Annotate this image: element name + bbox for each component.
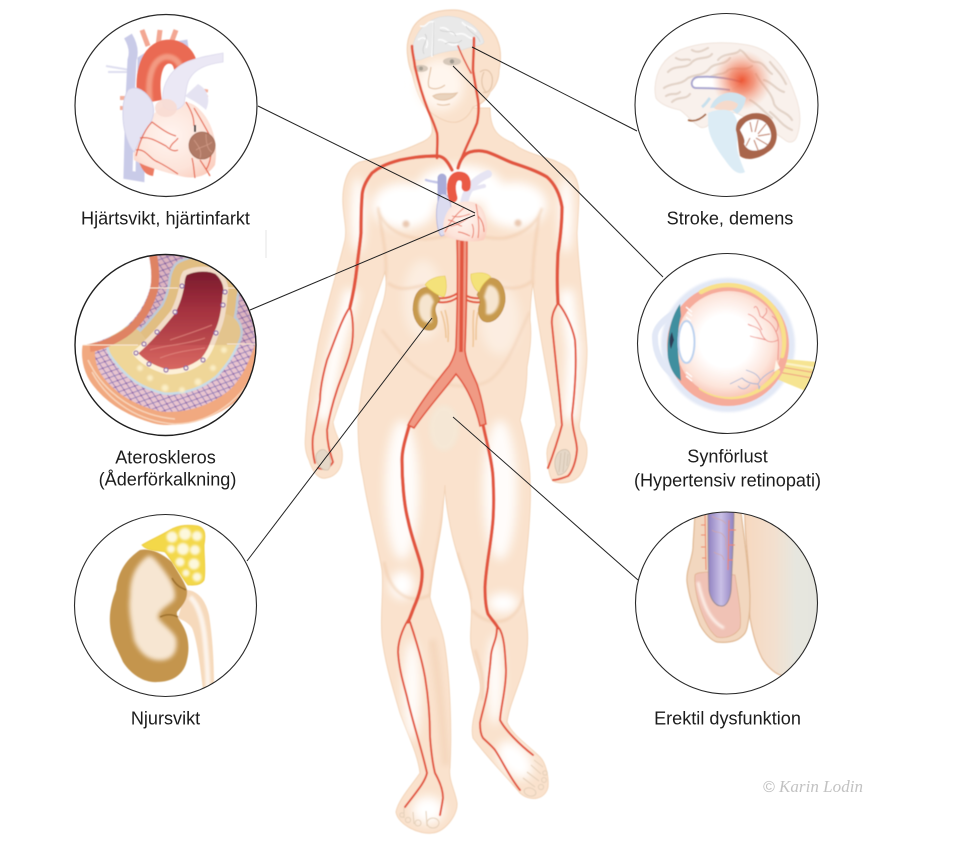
section step [83,288,255,345]
label: kidney failure: Njursvikt [131,708,200,728]
panel: stroke and dementia [635,14,818,196]
label: atherosclerosis: Ateroskleros [115,448,216,468]
outer wall upper section [90,250,155,348]
left kidney [413,287,440,330]
left ureter [441,310,448,342]
panel ring [638,254,818,434]
figure skin silhouette [305,108,587,833]
carotid and head arteries [412,38,479,168]
renal arteries [438,293,482,302]
label: stroke and dementia: Stroke, demens [667,208,793,228]
hand palms [316,449,570,475]
connector line: heart [258,106,475,213]
panel: vision loss [638,254,818,434]
arteries [313,38,577,815]
lumen texture [150,325,212,358]
panel ring [74,514,256,696]
right atrium [436,194,451,236]
panel: kidney failure [74,514,256,696]
right leg arteries [461,372,533,790]
artery cross section [70,250,255,424]
eye illustration [655,278,818,412]
panel ring [636,512,818,694]
panel: heart failure [75,14,257,196]
pulmonary and vena cava vessels [426,174,488,206]
connector line: eye [453,66,663,277]
left leg arteries [398,372,449,815]
anatomy illustration [686,512,817,676]
connector line: erectile dysfunction [453,417,638,580]
right ureter [473,310,478,347]
label: atherosclerosis subtitle: (Åderförkalkning) [99,470,236,490]
dark cut section tint [83,255,253,345]
label: vision loss: Synförlust [687,446,768,466]
label: heart failure: Hjärtsvikt, hjärtinfarkt [81,208,250,228]
panel: erectile dysfunction [634,512,818,694]
adrenal gland [142,525,205,585]
face highlight [416,59,464,111]
panel ring [75,14,257,196]
right kidney [477,278,505,322]
connector line: stroke [472,47,637,131]
right adrenal gland [471,273,491,292]
plaque bubbles [137,347,227,393]
kidneys [413,273,505,347]
right arm arteries [458,151,577,480]
brain in skull [412,16,484,60]
kidney illustration [110,550,214,690]
label: hypertensive retinopathy: (Hypertensiv retinopati) [634,470,821,490]
white gap left of the artery [82,256,152,346]
left arm arteries [313,156,452,469]
head [407,10,500,122]
eyes [414,58,461,72]
nose and mouth [428,67,492,105]
heart body [443,201,487,241]
panel: atherosclerosis [70,250,256,436]
genital area [429,405,459,451]
label: erectile dysfunction: Erektil dysfunktion [654,708,801,728]
human figure [305,10,587,833]
signature: © [763,779,775,796]
toes [400,760,547,828]
connector line: atherosclerosis [250,215,475,310]
heart illustration [106,30,223,178]
cerebellum [736,113,777,159]
brain illustration [655,43,800,173]
aortic arch [451,176,466,198]
coronary arteries [445,204,484,238]
left adrenal gland [425,276,446,297]
nipples [402,220,522,228]
heart [426,174,488,241]
endothelial cells [134,284,227,372]
panel ring [75,254,256,436]
aorta [408,240,486,428]
outer wall stripes [88,360,250,424]
signature: Karin Lodin [778,777,863,796]
connector line: kidney [247,318,432,561]
panel ring [635,14,818,196]
